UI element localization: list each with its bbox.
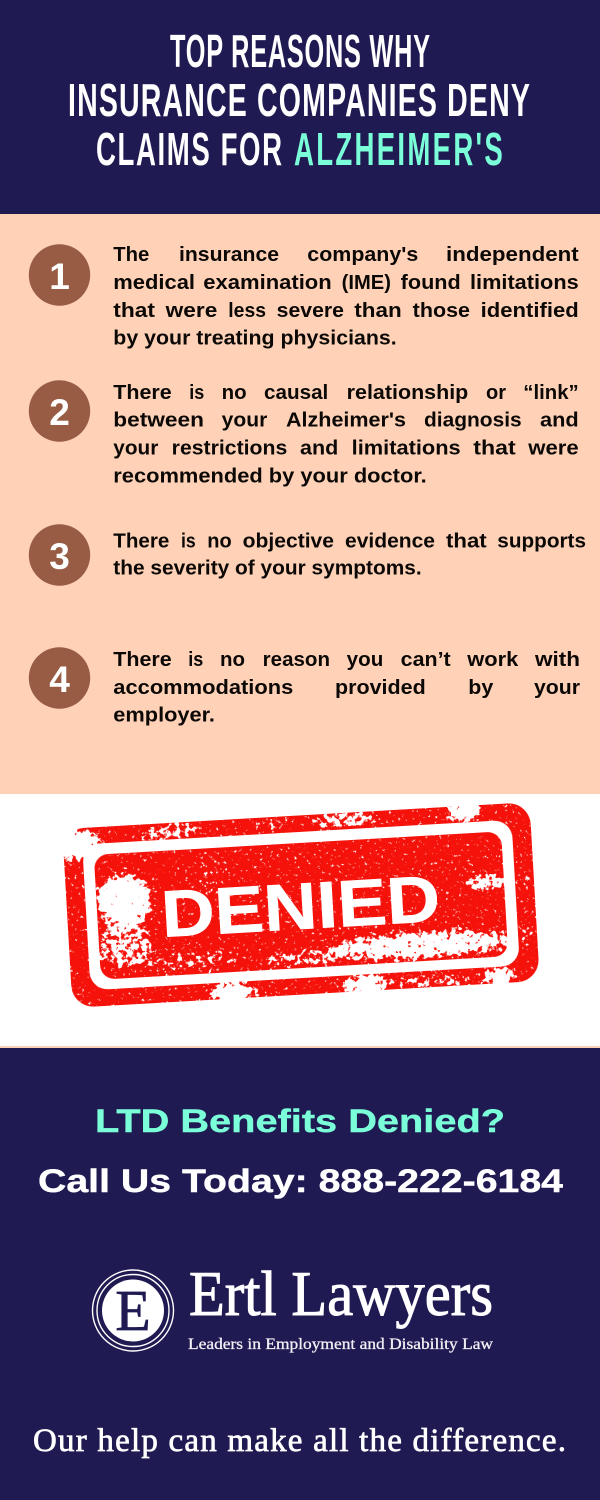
text: reason 1: insurance [179,244,279,266]
text: reason 4: can’t [401,649,451,671]
text: reason 4: employer. [113,704,215,726]
icon: number badges: 3 [49,536,70,577]
text: reason 1: examination [203,272,332,294]
text: reason 2: and [300,438,338,460]
logo: Ertl Lawyers [92,1260,494,1353]
text: reason 3: that [446,530,487,552]
icon: E seal [92,1270,174,1351]
call to action: phone: Call Us Today: 888-222-6184 [38,1163,563,1199]
title [68,25,530,176]
title: INSURANCE COMPANIES DENY [68,75,530,127]
icon: number badges: 1 [49,256,70,297]
text: reason 4: is [188,649,203,671]
text: reason 2: restrictions [172,438,287,460]
icon: number badges [28,244,90,709]
text: reason 4: your [534,677,580,699]
text: reason 2: limitations [352,438,461,460]
text: reason 1: by your treating physicians. [113,328,397,350]
text: reason 4: There [113,649,172,671]
text: reason 4: you [347,649,383,671]
text: reason 4: provided [335,677,426,699]
tagline: Our help can make all the difference. [33,1423,566,1459]
text: reason 3: evidence [345,530,435,552]
text: reason 1 [113,244,579,350]
text: reason 4: no [220,649,245,671]
image: denied stamp [64,803,539,1007]
text: reason 2: recommended by your doctor. [113,466,427,488]
title: TOP REASONS WHY [170,25,430,77]
footer band [0,1046,600,1500]
text: reason 3: supports [497,530,586,552]
text: reason 3: no [207,530,232,552]
heading: LTD benefits: LTD Benefits Denied? [95,1103,505,1139]
text: reason 1: The [113,244,149,266]
text: reason 2: were [527,438,579,460]
worn patches [45,795,542,1013]
text: reason 2: your [222,410,268,432]
text: reason 2: relationship [347,382,468,404]
text: reason 2: Alzheimer's [286,410,406,432]
text: reason 2: and [540,410,579,432]
text: reason 3 [113,530,586,580]
text: reason 1: medical [113,272,195,294]
text: reason 1: severe [277,300,344,322]
text: reason 2: causal [264,382,328,404]
text: reason 4: with [534,649,580,671]
text: reason 1: found [401,272,461,294]
text: reason 4: reason [263,649,330,671]
logo: Ertl Lawyers: Ertl Lawyers [189,1260,493,1329]
text: reason 2: is [189,382,204,404]
text: reason 1: company's [307,244,418,266]
header band [0,0,600,214]
text: reason 4: accommodations [113,677,293,699]
text: reason 2: There [113,382,172,404]
icon: number badges: 4 [49,659,70,700]
icon: E seal: E [115,1278,151,1343]
text: reason 3: is [181,530,196,552]
text: reason 3: objective [243,530,334,552]
text: reason 1: less [228,300,266,322]
text: reason 2: that [473,438,516,460]
text: reason 2: no [222,382,247,404]
text: reason 2 [113,382,579,488]
text: reason 4: work [466,649,519,671]
text: reason 2: your [113,438,159,460]
text: reason 1: that [113,300,155,322]
stamp word: DENIED [159,861,442,951]
text: reason 3: There [113,530,169,552]
text: reason 1: (IME) [342,272,391,294]
panel: reasons background [0,214,600,794]
text: reason 1: identified [481,300,579,322]
text: reason 1: were [165,300,217,322]
text: reason 2: diagnosis [424,410,522,432]
icon: number badges: 2 [49,392,70,433]
text: reason 4 [113,649,580,726]
text block: reasons [113,244,586,726]
title: ALZHEIMER'S [294,125,503,176]
text: reason 4: by [468,677,494,699]
text: reason 3: the severity of your symptoms. [113,558,422,580]
text: reason 1: limitations [470,272,579,294]
text: reason 1: independent [446,244,579,266]
text: reason 2: between [113,410,204,432]
title: CLAIMS FOR [96,125,282,176]
text: reason 2: or [486,382,506,404]
logo: Ertl Lawyers: Leaders in Employment and Disability Law [188,1336,493,1353]
text: reason 1: than [354,300,402,322]
text: reason 1: those [413,300,470,322]
text: reason 2: “link” [523,382,579,404]
